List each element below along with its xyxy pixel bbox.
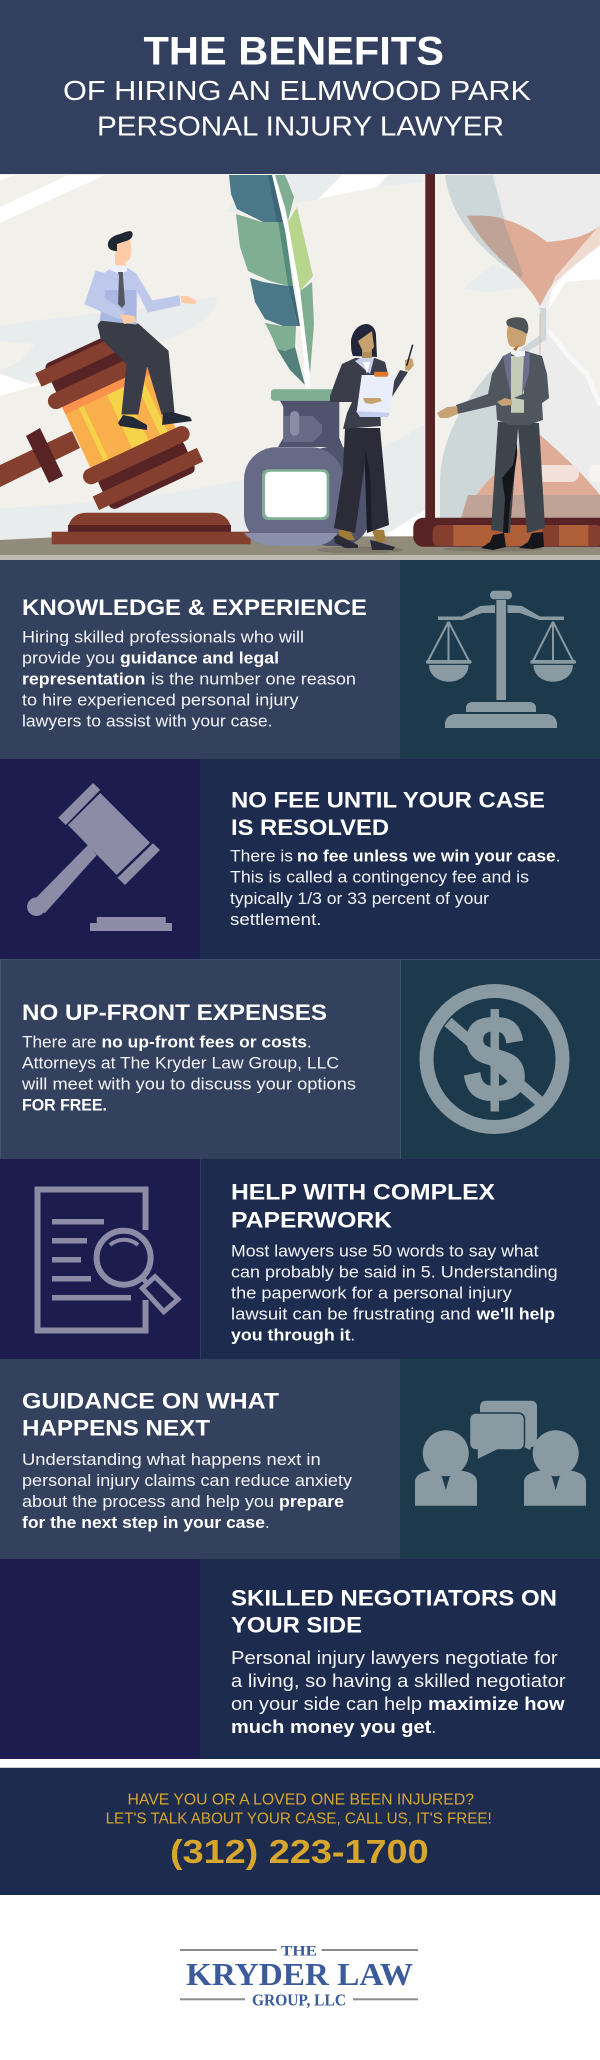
phone number: (312) 223-1700: [170, 1833, 429, 1870]
body text: prepare: [279, 1493, 344, 1511]
callout text: HAVE YOU OR A LOVED ONE BEEN INJURED?: [128, 1791, 474, 1808]
heading: IS RESOLVED: [231, 815, 389, 840]
body text: lawyers to assist with your case.: [22, 712, 272, 730]
body text: provide you: [22, 649, 115, 667]
body text: There is: [230, 848, 293, 866]
body text: is the number one reason: [151, 670, 356, 688]
illustration: lawyers with gavel, quill and hourglass: [0, 174, 600, 560]
panel: guidance on what happens next: [0, 1359, 600, 1559]
body text: Understanding what happens next in: [22, 1451, 321, 1469]
body text: for the next step in your case: [22, 1514, 265, 1532]
body text: This is called a contingency fee and is: [230, 869, 529, 887]
icon: no dollar sign: $: [464, 991, 525, 1127]
callout text: [106, 1791, 492, 1827]
logo: The Kryder Law Group, LLC: GROUP, LLC: [252, 1991, 346, 2010]
body text: FOR FREE.: [22, 1097, 107, 1115]
body text: the paperwork for a personal injury: [231, 1285, 513, 1303]
heading: PAPERWORK: [231, 1207, 393, 1232]
icon: document with magnifier: [38, 1190, 178, 1330]
icon: scales of justice: [426, 591, 576, 728]
woman with clipboard: [317, 324, 414, 554]
quill feather: [229, 175, 314, 388]
body text: no fee unless we win your case: [297, 848, 556, 866]
header panel: [0, 0, 600, 174]
title: OF HIRING AN ELMWOOD PARK: [63, 75, 531, 106]
body text: .: [431, 1717, 436, 1737]
body text: personal injury claims can reduce anxiety: [22, 1472, 353, 1490]
icon: no dollar sign: [426, 991, 562, 1127]
body text: will meet with you to discuss your options: [21, 1076, 356, 1094]
body text: a living, so having a skilled negotiator: [231, 1671, 566, 1691]
logo: The Kryder Law Group, LLC: [180, 1944, 418, 2010]
heading: KNOWLEDGE & EXPERIENCE: [22, 595, 367, 620]
body text: There are: [22, 1034, 96, 1052]
body text: typically 1/3 or 33 percent of your: [230, 890, 490, 908]
body text: [230, 848, 560, 929]
callout text: LET'S TALK ABOUT YOUR CASE, CALL US, IT'S FREE!: [106, 1810, 492, 1827]
body text: [21, 1034, 356, 1115]
heading: [22, 1388, 279, 1441]
body text: can probably be said in 5. Understanding: [231, 1264, 558, 1282]
body text: [231, 1648, 566, 1737]
body text: no up-front fees or costs: [102, 1034, 307, 1052]
body text: [231, 1243, 558, 1345]
logo: The Kryder Law Group, LLC: THE: [281, 1944, 317, 1960]
heading: [231, 1179, 495, 1232]
gavel: [0, 321, 251, 544]
hourglass: [440, 175, 600, 518]
body text: we'll help: [475, 1306, 555, 1324]
heading: YOUR SIDE: [231, 1613, 362, 1638]
body text: Attorneys at The Kryder Law Group, LLC: [22, 1055, 339, 1073]
heading: SKILLED NEGOTIATORS ON: [231, 1585, 557, 1610]
ink bottle: [244, 389, 370, 546]
heading: GUIDANCE ON WHAT: [22, 1388, 279, 1413]
title: PERSONAL INJURY LAWYER: [97, 111, 504, 142]
heading: [231, 1585, 557, 1638]
body text: on your side can help: [231, 1694, 422, 1714]
call to action panel: [0, 1767, 600, 1895]
body text: lawsuit can be frustrating and: [231, 1306, 471, 1324]
heading: NO UP-FRONT EXPENSES: [22, 1000, 327, 1025]
body text: much money you get: [231, 1717, 431, 1737]
body text: Most lawyers use 50 words to say what: [231, 1243, 539, 1261]
body text: to hire experienced personal injury: [22, 691, 299, 709]
panel: no fee until resolved: [0, 759, 600, 959]
ground: [0, 536, 600, 560]
body text: .: [307, 1034, 312, 1052]
panel: help with complex paperwork: [0, 1159, 600, 1359]
body text: Personal injury lawyers negotiate for: [231, 1648, 558, 1668]
body text: [22, 628, 356, 730]
body text: settlement.: [230, 911, 322, 929]
body text: .: [265, 1514, 270, 1532]
panel: no up-front expenses: [0, 959, 600, 1159]
heading: [231, 787, 545, 840]
standing man: [437, 317, 549, 550]
body text: .: [556, 848, 560, 866]
panel: skilled negotiators: [0, 1559, 600, 1759]
heading: NO FEE UNTIL YOUR CASE: [231, 787, 545, 812]
body text: guidance and legal: [120, 649, 279, 667]
body text: you through it: [231, 1327, 351, 1345]
body text: [22, 1451, 353, 1532]
title: [63, 30, 531, 142]
hourglass post and base: [413, 174, 600, 552]
icon: gavel: [27, 783, 172, 931]
heading: HELP WITH COMPLEX: [231, 1179, 495, 1204]
seated man: [85, 231, 197, 430]
logo: The Kryder Law Group, LLC: KRYDER LAW: [186, 1956, 413, 1992]
title: THE BENEFITS: [144, 30, 444, 74]
body text: Hiring skilled professionals who will: [22, 628, 304, 646]
body text: maximize how: [428, 1694, 566, 1714]
body text: representation: [22, 670, 146, 688]
body text: about the process and help you: [22, 1493, 274, 1511]
body text: .: [350, 1327, 355, 1345]
icon: two people talking: [415, 1401, 586, 1506]
panel: knowledge and experience: [0, 560, 600, 759]
heading: HAPPENS NEXT: [22, 1416, 210, 1441]
